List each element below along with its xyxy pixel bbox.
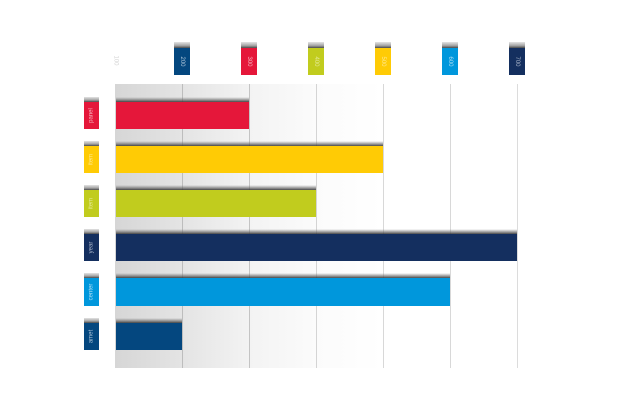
top tab: 600 [442, 42, 458, 75]
row: dark blue bar: amet [88, 330, 94, 343]
row: red bar [84, 97, 249, 129]
top tab: 500 [375, 42, 391, 75]
row: blue bar [84, 273, 450, 306]
top tab: 600: 600 [447, 56, 453, 67]
row: green bar: item [88, 198, 94, 209]
row: yellow bar [84, 141, 383, 173]
top tab: 400: 400 [313, 56, 319, 67]
row: green bar [84, 185, 316, 217]
row: red bar: panel [88, 108, 94, 123]
top tab: 700: 700 [514, 56, 520, 67]
row: navy bar [84, 229, 517, 261]
row: blue bar: center [88, 284, 94, 300]
top tab: 200 [174, 42, 190, 75]
grid lines [182, 84, 518, 368]
top tab: 500: 500 [380, 56, 386, 67]
top tab: 300 [241, 42, 257, 75]
row: navy bar: year [88, 242, 94, 253]
top tab: 200: 200 [179, 56, 185, 67]
row: dark blue bar [84, 318, 182, 350]
axis label: 100: 100 [112, 55, 118, 66]
top tab: 400 [308, 42, 324, 75]
plot background [115, 84, 383, 368]
top tab: 300: 300 [246, 56, 252, 67]
top tab: 700 [509, 42, 525, 75]
row: yellow bar: item [88, 154, 94, 165]
